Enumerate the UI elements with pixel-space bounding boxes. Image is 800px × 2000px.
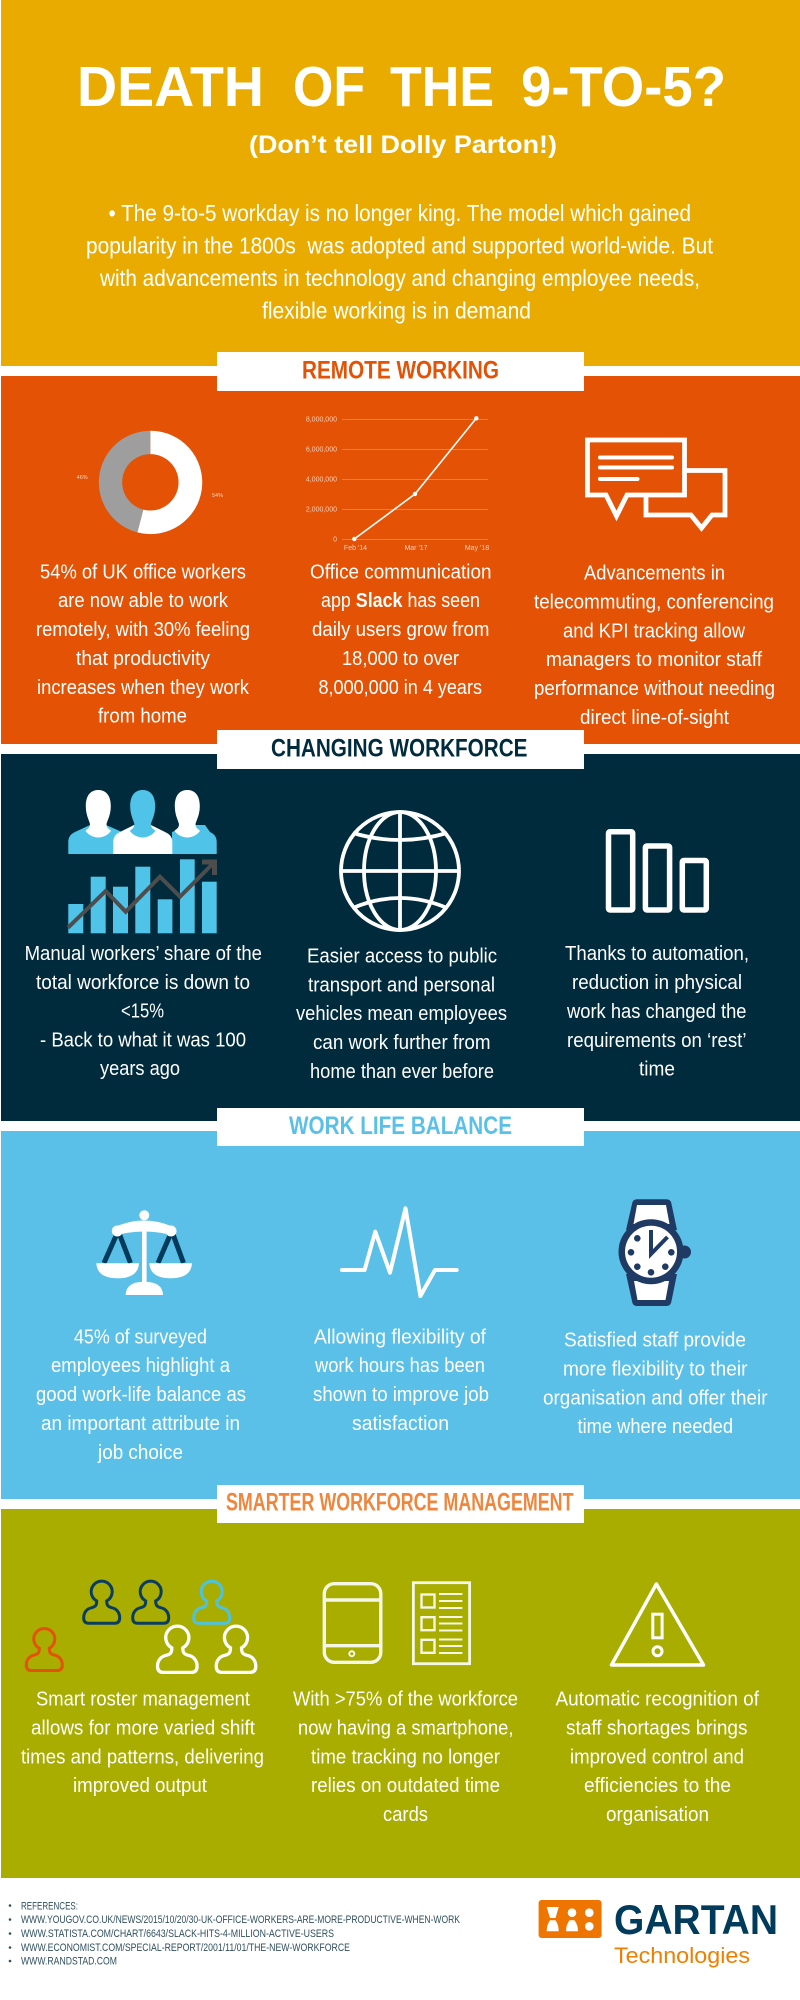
references list: REFERENCES: (21, 1900, 78, 1912)
chart: Slack daily users line: 2,000,000 (306, 506, 337, 514)
text: work-life survey: good work-life balance as (36, 1384, 246, 1406)
logo: Gartan Technologies: GARTAN (614, 1896, 778, 1943)
heading: work life balance: WORK LIFE BALANCE (289, 1112, 512, 1140)
text: flexible hours: Allowing flexibility of (314, 1326, 486, 1348)
icon: shrinking bars (608, 832, 706, 910)
chart: Slack daily users line: May '18 (465, 545, 489, 552)
text: Slack growth: 18,000 to over (342, 648, 459, 670)
panel: header (1, 0, 800, 366)
text: roster management: allows for more varied shift (31, 1718, 255, 1740)
text: UK office workers: are now able to work (58, 590, 229, 612)
heading: work life balance (217, 1108, 584, 1146)
text: UK office workers (36, 561, 250, 728)
text: Slack growth: Office communication (310, 561, 492, 583)
icon: globe (341, 812, 459, 930)
panel: work life balance (1, 1131, 800, 1499)
text: flexible hours: shown to improve job (313, 1384, 489, 1406)
text: automation: Thanks to automation, (565, 943, 749, 965)
text: satisfied staff: Satisfied staff provide (564, 1330, 746, 1352)
panel: changing workforce (1, 754, 800, 1121)
logo: Gartan Technologies: Technologies (614, 1943, 750, 1968)
text: smartphones: time tracking no longer (311, 1746, 500, 1768)
text: manual workers: total workforce is down to (36, 972, 250, 994)
text: satisfied staff: organisation and offer their (543, 1387, 768, 1409)
text: staff shortages: improved control and (570, 1746, 744, 1768)
icon: roster people (26, 1581, 256, 1672)
icon: wristwatch (618, 1199, 691, 1306)
text: transport access: home than ever before (310, 1061, 494, 1083)
chart: Slack daily users line (306, 416, 489, 552)
title: 9-TO-5? (521, 55, 726, 119)
text: roster management: times and patterns, delivering (21, 1746, 264, 1768)
title: DEATH (77, 55, 264, 119)
intro text (86, 200, 714, 324)
text: Slack growth: app Slack has seen (321, 590, 480, 612)
intro text: flexible working is in demand (262, 298, 531, 324)
heading: smarter workforce management: SMARTER WORKFORCE MANAGEMENT (226, 1489, 574, 1517)
references list (9, 1900, 461, 1968)
text: Slack growth: 8,000,000 in 4 years (318, 677, 482, 699)
intro text: popularity in the 1800s was adopted and supported world-wide. But (86, 232, 714, 258)
text: work-life survey: 45% of surveyed (74, 1326, 207, 1348)
text: telecommuting advancements: telecommuting, conferencing (534, 592, 774, 614)
title (77, 55, 726, 119)
text: telecommuting advancements (534, 563, 775, 729)
title: THE (390, 55, 494, 119)
chart: Slack daily users line: Feb '14 (344, 545, 367, 552)
text: staff shortages (556, 1689, 759, 1826)
icon: smartphone (324, 1584, 381, 1662)
text: manual workers: years ago (100, 1058, 180, 1080)
chart: Slack daily users line: 0 (333, 536, 337, 544)
chart: Slack daily users line: Mar '17 (404, 545, 428, 552)
text: smartphones: now having a smartphone, (298, 1718, 514, 1740)
text: staff shortages: Automatic recognition of (556, 1689, 759, 1711)
text: flexible hours (313, 1326, 489, 1435)
icon: workers and rising bar chart (68, 790, 217, 933)
text: telecommuting advancements: managers to monitor staff (546, 649, 762, 671)
icon: pulse line (342, 1208, 457, 1296)
text: automation: requirements on ‘rest’ (567, 1030, 746, 1052)
intro text: with advancements in technology and changing employee needs, (99, 265, 700, 291)
text: flexible hours: work hours has been (314, 1355, 485, 1377)
text: satisfied staff: time where needed (578, 1416, 733, 1438)
text: staff shortages: efficiencies to the (584, 1775, 731, 1797)
text: work-life survey: an important attribute in (41, 1413, 240, 1435)
panel: remote working (1, 376, 800, 744)
text: telecommuting advancements: performance without needing (534, 678, 775, 700)
references list: WWW.RANDSTAD.COM (21, 1956, 117, 1968)
subtitle: (Don’t tell Dolly Parton!) (249, 131, 557, 159)
text: UK office workers: from home (98, 706, 187, 728)
references list: WWW.STATISTA.COM/CHART/6643/SLACK-HITS-4-MILLION-ACTIVE-USERS (21, 1928, 334, 1940)
references list: WWW.ECONOMIST.COM/SPECIAL-REPORT/2001/11/01/THE-NEW-WORKFORCE (21, 1942, 350, 1954)
chart: donut 54%: 46% (77, 475, 88, 481)
text: manual workers: Manual workers’ share of the (25, 943, 262, 965)
text: staff shortages: organisation (606, 1804, 709, 1826)
chart: donut 54% (77, 431, 224, 534)
text: telecommuting advancements: direct line-of-sight (580, 707, 729, 729)
panel: smarter workforce management (1, 1509, 800, 1878)
chart: Slack daily users line: 4,000,000 (306, 476, 337, 484)
heading: smarter workforce management (217, 1485, 584, 1523)
heading: remote working: REMOTE WORKING (302, 356, 499, 384)
text: smartphones: With >75% of the workforce (293, 1689, 518, 1711)
title: OF (293, 55, 365, 119)
text: satisfied staff (543, 1330, 768, 1438)
text: transport access: vehicles mean employees (296, 1003, 507, 1025)
text: telecommuting advancements: and KPI tracking allow (563, 620, 746, 642)
text: transport access (296, 946, 507, 1083)
text: Slack growth (310, 561, 492, 699)
text: manual workers: - Back to what it was 100 (40, 1030, 246, 1052)
text: smartphones: relies on outdated time (311, 1775, 500, 1797)
logo: Gartan Technologies (539, 1896, 778, 1968)
chart: Slack daily users line: 6,000,000 (306, 446, 337, 454)
text: UK office workers: remotely, with 30% feeling (36, 619, 250, 641)
text: flexible hours: satisfaction (352, 1413, 449, 1435)
chart: donut 54%: 54% (212, 493, 224, 499)
text: manual workers: <15% (121, 1001, 164, 1023)
text: satisfied staff: more flexibility to their (563, 1358, 748, 1380)
text: roster management: Smart roster management (36, 1689, 250, 1711)
text: roster management (21, 1689, 264, 1797)
text: smartphones (293, 1689, 518, 1826)
references list: WWW.YOUGOV.CO.UK/NEWS/2015/10/20/30-UK-OFFICE-WORKERS-ARE-MORE-PRODUCTIVE-WHEN-WORK (21, 1914, 461, 1926)
text: automation: work has changed the (566, 1001, 746, 1023)
text: automation: reduction in physical (572, 972, 742, 994)
icon: speech bubbles (588, 440, 725, 528)
text: work-life survey: employees highlight a (51, 1355, 231, 1377)
heading: changing workforce: CHANGING WORKFORCE (271, 734, 528, 762)
text: transport access: can work further from (313, 1032, 490, 1054)
text: Slack growth: daily users grow from (312, 619, 490, 641)
text: smartphones: cards (383, 1804, 428, 1826)
text: telecommuting advancements: Advancements in (584, 563, 725, 585)
heading: remote working (217, 352, 584, 391)
chart: Slack daily users line: 8,000,000 (306, 416, 337, 424)
text: work-life survey: job choice (97, 1442, 183, 1464)
icon: scales (96, 1210, 192, 1295)
text: automation: time (639, 1058, 675, 1080)
text: roster management: improved output (73, 1775, 207, 1797)
icon: warning triangle (612, 1584, 704, 1665)
intro text: • The 9-to-5 workday is no longer king. The model which gained (108, 200, 691, 226)
text: work-life survey (36, 1326, 246, 1464)
text: UK office workers: 54% of UK office workers (40, 561, 246, 583)
text: manual workers (25, 943, 262, 1080)
text: UK office workers: that productivity (76, 648, 210, 670)
text: transport access: transport and personal (308, 974, 495, 996)
text: UK office workers: increases when they work (37, 677, 250, 699)
heading: changing workforce (217, 730, 584, 769)
icon: time card (413, 1583, 470, 1664)
text: transport access: Easier access to public (307, 946, 497, 968)
text: automation (565, 943, 749, 1080)
text: staff shortages: staff shortages brings (566, 1718, 748, 1740)
